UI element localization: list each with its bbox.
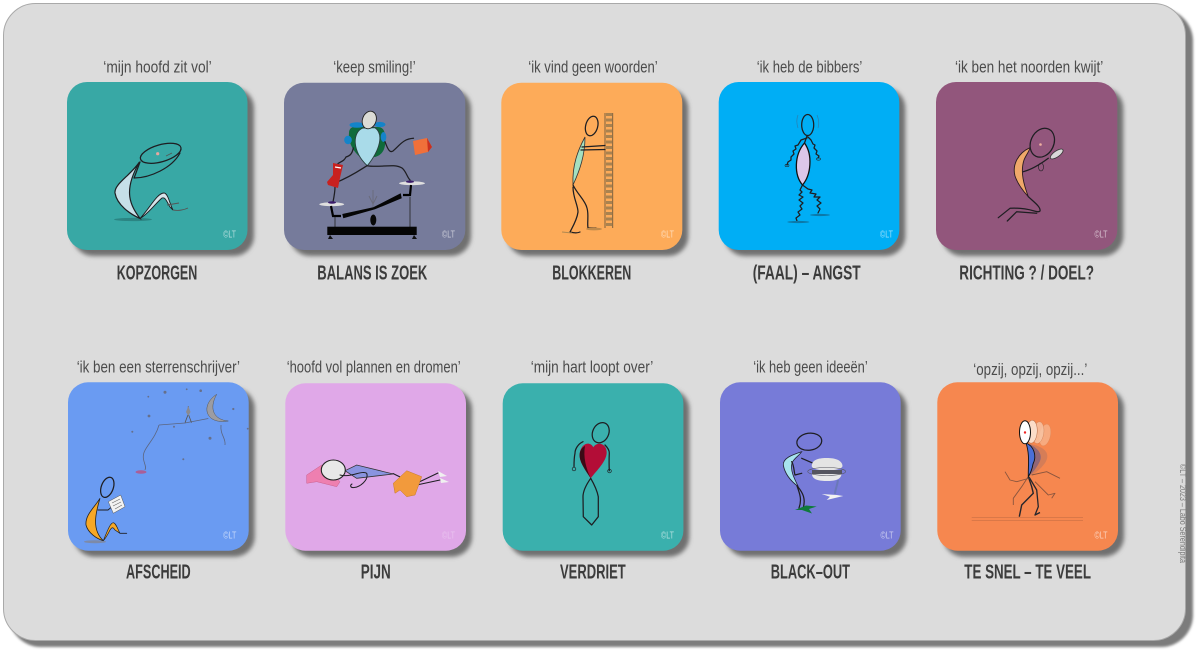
title: RICHTING ? / DOEL? <box>959 262 1094 285</box>
card: pijn <box>285 359 472 584</box>
quote: ‘hoofd vol plannen en dromen’ <box>287 359 461 377</box>
illustration: rushing figure with ghost images <box>972 420 1083 521</box>
card: afscheid <box>68 359 255 584</box>
card: black-out <box>720 359 907 584</box>
title: AFSCHEID <box>126 561 191 584</box>
copyright mark: ©LT <box>880 230 893 241</box>
quote: ‘opzij, opzij, opzij...’ <box>973 361 1087 379</box>
copyright mark: ©LT <box>661 230 674 241</box>
copyright mark: ©LT <box>1094 230 1108 241</box>
copyright mark: ©LT <box>661 530 674 541</box>
quote: ‘ik vind geen woorden’ <box>528 59 658 77</box>
card: te snel te veel <box>937 361 1124 584</box>
quote: ‘keep smiling!’ <box>333 59 416 77</box>
copyright mark: ©LT <box>880 530 894 541</box>
quote: ‘ik heb de bibbers’ <box>757 59 862 77</box>
title: TE SNEL – TE VEEL <box>964 561 1091 584</box>
title: KOPZORGEN <box>117 262 197 285</box>
quote: ‘mijn hoofd zit vol’ <box>103 59 212 77</box>
copyright mark: ©LT <box>223 230 236 241</box>
quote: ‘ik ben het noorden kwijt’ <box>955 59 1103 77</box>
illustration: figure with big heart <box>572 420 612 525</box>
title: BLOKKEREN <box>552 262 631 285</box>
illustration: trembling figure <box>785 114 830 223</box>
illustration: balancing figure on scale <box>319 109 432 239</box>
illustration: figure lying down <box>307 460 449 497</box>
title: BALANS IS ZOEK <box>317 262 427 285</box>
title: PIJN <box>361 561 391 584</box>
illustration: figure pushing a wall <box>562 113 613 233</box>
card: richting <box>936 59 1123 285</box>
quote: ‘ik ben een sterrenschrijver’ <box>77 359 240 377</box>
quote: ‘ik heb geen ideeën’ <box>753 359 868 377</box>
title: BLACK–OUT <box>771 561 850 584</box>
vertical credit: ©LT – 2023 – Labo Serendipità <box>1177 464 1188 564</box>
card: balans is zoek <box>284 59 471 285</box>
illustration: star writer, moon and stars <box>84 388 249 543</box>
copyright mark: ©LT <box>223 530 236 541</box>
title: (FAAL) – ANGST <box>753 262 861 285</box>
illustration: kneeling figure with magnifier <box>998 124 1065 221</box>
illustration: figure with empty burger head <box>783 432 846 514</box>
copyright mark: ©LT <box>442 530 455 541</box>
illustration: figure with big head <box>114 139 188 221</box>
copyright mark: ©LT <box>1094 530 1108 541</box>
card: verdriet <box>503 359 689 584</box>
copyright mark: ©LT <box>442 230 455 241</box>
title: VERDRIET <box>560 561 626 584</box>
card: kopzorgen <box>67 59 254 285</box>
card: blokkeren <box>501 59 688 285</box>
quote: ‘mijn hart loopt over’ <box>531 359 653 377</box>
card: faalangst <box>719 59 905 285</box>
